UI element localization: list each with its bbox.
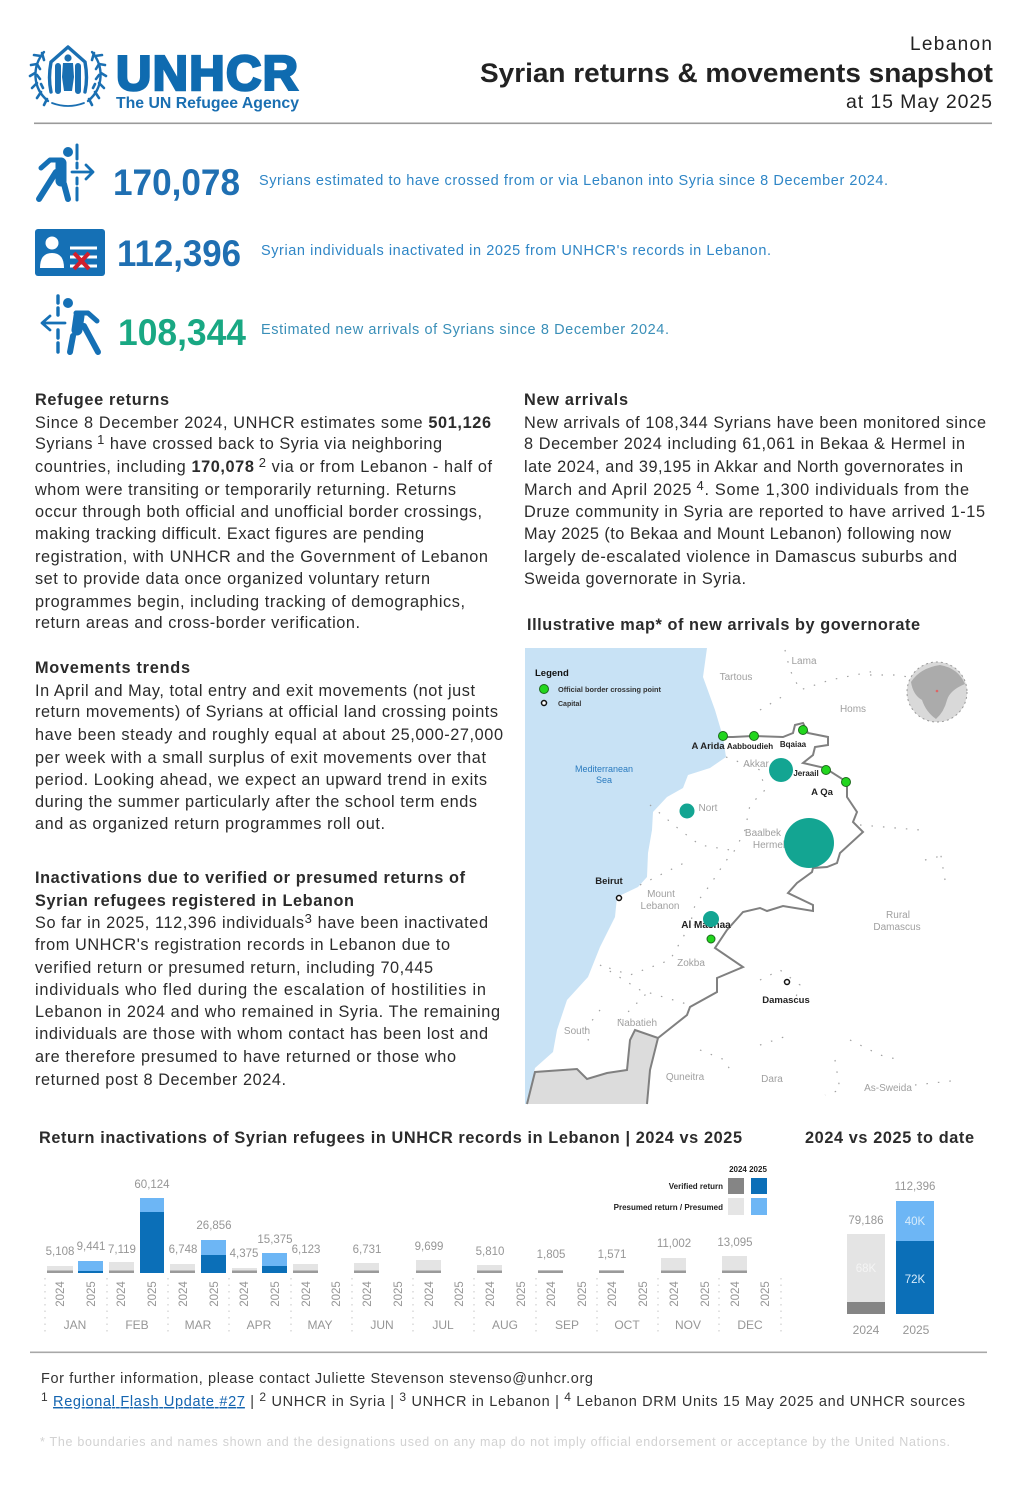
map legend <box>535 668 662 708</box>
stat: individuals inactivated <box>35 229 771 276</box>
neighbouring territory <box>527 1030 658 1104</box>
logo tagline: The UN Refugee Agency <box>116 95 299 112</box>
value labels: 6,748 <box>169 1244 197 1256</box>
body text: programmes begin, including tracking of demographics, <box>35 593 465 611</box>
map labels: Aabboudieh <box>727 742 773 751</box>
value labels: 1,805 <box>537 1249 565 1261</box>
2025 stacked bar <box>895 1181 935 1337</box>
month labels: APR <box>247 1318 272 1332</box>
year axis labels: 2024 <box>239 1281 251 1307</box>
description: Syrians estimated to have crossed from or via Lebanon into Syria since 8 December 2024. <box>259 173 888 189</box>
body text: 8 December 2024 including 61,061 in Bekaa & Hermel in <box>524 435 965 453</box>
2025 stacked bar: 40K <box>905 1216 926 1228</box>
sources line: Lebanon DRM Units 15 May 2025 and UNHCR sources <box>572 1394 965 1410</box>
body text <box>35 911 500 1089</box>
sources line: 3 <box>399 1390 406 1404</box>
map labels: Al Masnaa <box>681 920 731 931</box>
body text: are therefore presumed to have returned or those who <box>35 1048 456 1066</box>
body text <box>524 414 986 588</box>
body text: largely de-escalated violence in Damascus suburbs and <box>524 548 957 566</box>
body text: have been steady and roughly equal at about 25,000-27,000 <box>35 726 503 744</box>
map labels: Tartous <box>720 672 752 683</box>
body text: set to provide data once organized voluntary return <box>35 570 430 588</box>
chart legend: 2024 2025 <box>729 1165 767 1174</box>
2025 bars <box>78 1198 287 1273</box>
body text: March and April 2025 <box>524 481 691 499</box>
heading: Movements trends <box>35 659 190 677</box>
year axis labels: 2025 <box>209 1281 221 1307</box>
body text: individuals who fled during the escalation of hostilities in <box>35 981 486 999</box>
month labels: AUG <box>492 1318 518 1332</box>
stat: new arrivals <box>42 296 669 353</box>
capital markers <box>616 896 790 984</box>
body text: Sweida governorate in Syria. <box>524 570 746 588</box>
body text: New arrivals of 108,344 Syrians have been monitored since <box>524 414 986 432</box>
map labels: Nort <box>699 803 718 814</box>
value labels: 15,375 <box>257 1234 293 1246</box>
month labels: JUN <box>370 1318 394 1332</box>
description: Syrian individuals inactivated in 2025 from UNHCR's records in Lebanon. <box>261 243 771 259</box>
body text: via or from Lebanon - half of <box>267 458 492 476</box>
value labels: 11,002 <box>657 1238 691 1250</box>
month labels: OCT <box>614 1318 640 1332</box>
body text: May 2025 (to Bekaa and Mount Lebanon) following now <box>524 525 951 543</box>
value labels <box>46 1179 753 1261</box>
month labels: DEC <box>737 1318 763 1332</box>
text block: inactivations <box>35 869 500 1089</box>
year axis labels: 2025 <box>638 1281 650 1307</box>
heading: Refugee returns <box>35 391 169 409</box>
body text: return movements) of Syrians at official land crossing points <box>35 703 498 721</box>
value labels: 13,095 <box>717 1237 753 1249</box>
year axis labels: 2025 <box>270 1281 282 1307</box>
sea <box>525 648 726 1104</box>
month labels: JUL <box>432 1318 454 1332</box>
year axis labels: 2025 <box>700 1281 712 1307</box>
contact line: For further information, please contact Juliette Stevenson stevenso@unhcr.org <box>41 1371 593 1387</box>
map labels: Mediterranean <box>575 764 633 774</box>
year axis labels: 2025 <box>454 1281 466 1307</box>
body text: Druze community in Syria are reported to have arrived 1-15 <box>524 503 985 521</box>
year axis labels: 2025 <box>577 1281 589 1307</box>
body text: whom were transiting or temporarily returning. Returns <box>34 481 456 499</box>
body text: registration, with UNHCR and the Government of Lebanon <box>35 548 488 566</box>
map labels: Quneitra <box>666 1072 705 1083</box>
body text: making tracking difficult. Exact figures are pending <box>35 525 424 543</box>
map labels: Nabatieh <box>617 1018 657 1029</box>
year axis labels: 2025 <box>516 1281 528 1307</box>
body text: 4 <box>692 478 704 493</box>
value labels: 9,699 <box>415 1241 443 1253</box>
year axis labels: 2024 <box>362 1281 374 1307</box>
icon: ID card with red cross <box>35 229 105 276</box>
side chart heading: 2024 vs 2025 to date <box>805 1129 974 1147</box>
map labels: Bqaiaa <box>780 740 807 749</box>
body text: during the summer particularly after the school term ends <box>35 793 477 811</box>
header titles <box>480 34 993 113</box>
body text: Syrians <box>35 435 92 453</box>
body text: 2 <box>254 455 266 470</box>
year axis labels: 2024 <box>485 1281 497 1307</box>
2024 stacked bar <box>847 1215 885 1337</box>
value labels: 26,856 <box>196 1220 232 1232</box>
body text: Since 8 December 2024, UNHCR estimates some 501,126 <box>35 414 491 432</box>
2024 bars <box>47 1256 747 1273</box>
footer <box>40 1371 965 1449</box>
stat: Syrians crossed into Syria <box>39 145 888 203</box>
value labels: 4,375 <box>230 1248 258 1260</box>
month labels: SEP <box>555 1318 579 1332</box>
map labels: Lebanon <box>641 901 679 912</box>
2025 stacked bar: 2025 <box>903 1323 930 1337</box>
2025 stacked bar: 112,396 <box>895 1181 935 1193</box>
value labels: 60,124 <box>134 1179 170 1191</box>
number: 108,344 <box>118 312 246 353</box>
body text: countries, including 170,078 <box>35 458 254 476</box>
year axis labels: 2025 <box>393 1281 405 1307</box>
month labels: MAR <box>185 1318 212 1332</box>
body text <box>34 414 492 632</box>
sources line: Regional Flash Update #27 | <box>53 1394 254 1410</box>
chart legend: Presumed return / Presumed <box>614 1203 723 1212</box>
map labels: Zokba <box>677 958 705 969</box>
body text: from UNHCR's registration records in Lebanon due to <box>35 936 450 954</box>
number: 170,078 <box>113 162 240 203</box>
heading: Inactivations due to verified or presumed returns of <box>35 869 466 887</box>
border crossing points <box>707 726 850 943</box>
body text: returned post 8 December 2024. <box>35 1071 286 1089</box>
icon: person crossing left <box>42 296 98 352</box>
body text: 3 <box>305 911 312 926</box>
country label: Lebanon <box>910 34 992 55</box>
2024 stacked bar: 79,186 <box>848 1215 884 1227</box>
month labels <box>64 1318 763 1332</box>
map of Lebanon <box>525 648 967 1104</box>
number: 112,396 <box>117 233 241 274</box>
year axis labels: 2024 <box>301 1281 313 1307</box>
logo wordmark: UNHCR <box>116 47 298 101</box>
sources line: UNHCR in Syria | <box>267 1394 399 1410</box>
body text: occur through both official and unofficial border crossings, <box>35 503 482 521</box>
map disclaimer: * The boundaries and names shown and the designations used on any map do not imply official endorsement or acceptance by the United Nations. <box>40 1435 950 1449</box>
year axis labels: 2024 <box>730 1281 742 1307</box>
body text <box>35 682 503 833</box>
body text: 1 <box>93 432 104 447</box>
icon: person crossing right <box>39 145 93 200</box>
month labels: NOV <box>675 1318 701 1332</box>
heading <box>35 869 466 910</box>
2024 verified strip <box>47 1270 747 1273</box>
value labels: 1,571 <box>598 1249 626 1261</box>
heading: New arrivals <box>524 391 628 409</box>
map legend: Capital <box>558 701 581 708</box>
map heading: Illustrative map* of new arrivals by governorate <box>527 616 920 634</box>
text block: movements trends <box>35 659 503 833</box>
year axis labels: 2025 <box>147 1281 159 1307</box>
map labels: Baalbek <box>745 828 782 839</box>
2025 stacked bar: 72K <box>905 1274 926 1286</box>
heading: Syrian refugees registered in Lebanon <box>35 892 354 910</box>
body text: late 2024, and 39,195 in Akkar and North governorates in <box>524 458 963 476</box>
map labels: Jeraail <box>793 769 819 778</box>
map labels: Akkar <box>743 759 769 770</box>
sources line: 4 <box>564 1390 571 1404</box>
text block: new arrivals <box>524 391 986 588</box>
map labels: Beirut <box>595 876 624 887</box>
map labels: A Arida <box>691 741 725 752</box>
map labels: Dara <box>761 1074 783 1085</box>
year axis labels: 2025 <box>86 1281 98 1307</box>
map labels: As-Sweida <box>864 1083 912 1094</box>
year axis labels: 2025 <box>331 1281 343 1307</box>
description: Estimated new arrivals of Syrians since 8 December 2024. <box>261 322 669 338</box>
value labels: 6,123 <box>292 1244 320 1256</box>
proportional circles: new arrivals <box>680 758 834 927</box>
body text: individuals are those with whom contact has been lost and <box>35 1025 488 1043</box>
map labels <box>564 656 921 1094</box>
value labels: 6,731 <box>353 1244 381 1256</box>
map labels: Mount <box>647 889 675 900</box>
value labels: 5,108 <box>46 1246 74 1258</box>
chart heading: Return inactivations of Syrian refugees in UNHCR records in Lebanon | 2024 vs 2025 <box>39 1129 742 1147</box>
value labels: 7,119 <box>108 1244 136 1256</box>
map labels: A Qa <box>811 787 834 798</box>
body text: Lebanon in 2024 and who remained in Syria. The remaining <box>35 1003 500 1021</box>
body text: and as organized return programmes roll out. <box>35 815 385 833</box>
chart legend <box>614 1165 767 1215</box>
body text: So far in 2025, 112,396 individuals <box>35 914 304 932</box>
locator globe <box>907 662 967 722</box>
sources line: UNHCR in Lebanon | <box>407 1394 564 1410</box>
date: at 15 May 2025 <box>846 91 992 113</box>
month labels: JAN <box>64 1318 86 1332</box>
map legend: Official border crossing point <box>558 687 662 694</box>
map labels: Sea <box>596 775 612 785</box>
year axis labels: 2025 <box>760 1281 772 1307</box>
map legend: Legend <box>535 668 569 679</box>
year axis labels: 2024 <box>669 1281 681 1307</box>
body text: have crossed back to Syria via neighboring <box>105 435 442 453</box>
body text: have been inactivated <box>312 914 488 932</box>
chart legend: Verified return <box>669 1182 723 1191</box>
year axis labels: 2024 <box>178 1281 190 1307</box>
year axis labels: 2024 <box>607 1281 619 1307</box>
sources line: 2 <box>259 1390 266 1404</box>
governorate boundaries <box>585 650 960 1095</box>
year axis labels: 2024 <box>116 1281 128 1307</box>
map labels: Homs <box>840 704 866 715</box>
body text: return areas and cross-border verification. <box>35 614 360 632</box>
sources line: 1 <box>41 1390 48 1404</box>
value labels: 9,441 <box>77 1241 105 1253</box>
map labels: Damascus <box>873 922 921 933</box>
main title: Syrian returns & movements snapshot <box>480 58 993 88</box>
value labels: 5,810 <box>476 1246 504 1258</box>
year axis labels <box>55 1281 772 1307</box>
2024 stacked bar: 68K <box>856 1263 877 1275</box>
logo: UNHCR <box>30 47 299 112</box>
icon: UNHCR emblem <box>30 47 106 106</box>
body text: per week with a small surplus of exit movements over that <box>35 749 486 767</box>
month labels: FEB <box>125 1318 149 1332</box>
international border <box>527 723 863 1104</box>
bar chart: monthly return inactivations <box>45 1165 781 1332</box>
bar chart: 2024 vs 2025 to date <box>847 1181 935 1337</box>
month separators <box>45 1278 781 1332</box>
year axis labels: 2024 <box>546 1281 558 1307</box>
body text: In April and May, total entry and exit movements (not just <box>35 682 475 700</box>
map labels: Lama <box>791 656 817 667</box>
map labels: South <box>564 1026 590 1037</box>
text block: refugee returns <box>34 391 492 632</box>
month labels: MAY <box>307 1318 333 1332</box>
map labels: Rural <box>886 910 910 921</box>
body text: . Some 1,300 individuals from the <box>704 481 969 499</box>
year axis labels: 2024 <box>424 1281 436 1307</box>
body text: verified return or presumed return, including 70,445 <box>35 959 433 977</box>
2024 stacked bar: 2024 <box>853 1323 880 1337</box>
map labels: Hermel <box>753 840 785 851</box>
map labels: Damascus <box>762 995 810 1006</box>
year axis labels: 2024 <box>55 1281 67 1307</box>
body text: period. Looking ahead, we expect an upward trend in exits <box>35 771 487 789</box>
